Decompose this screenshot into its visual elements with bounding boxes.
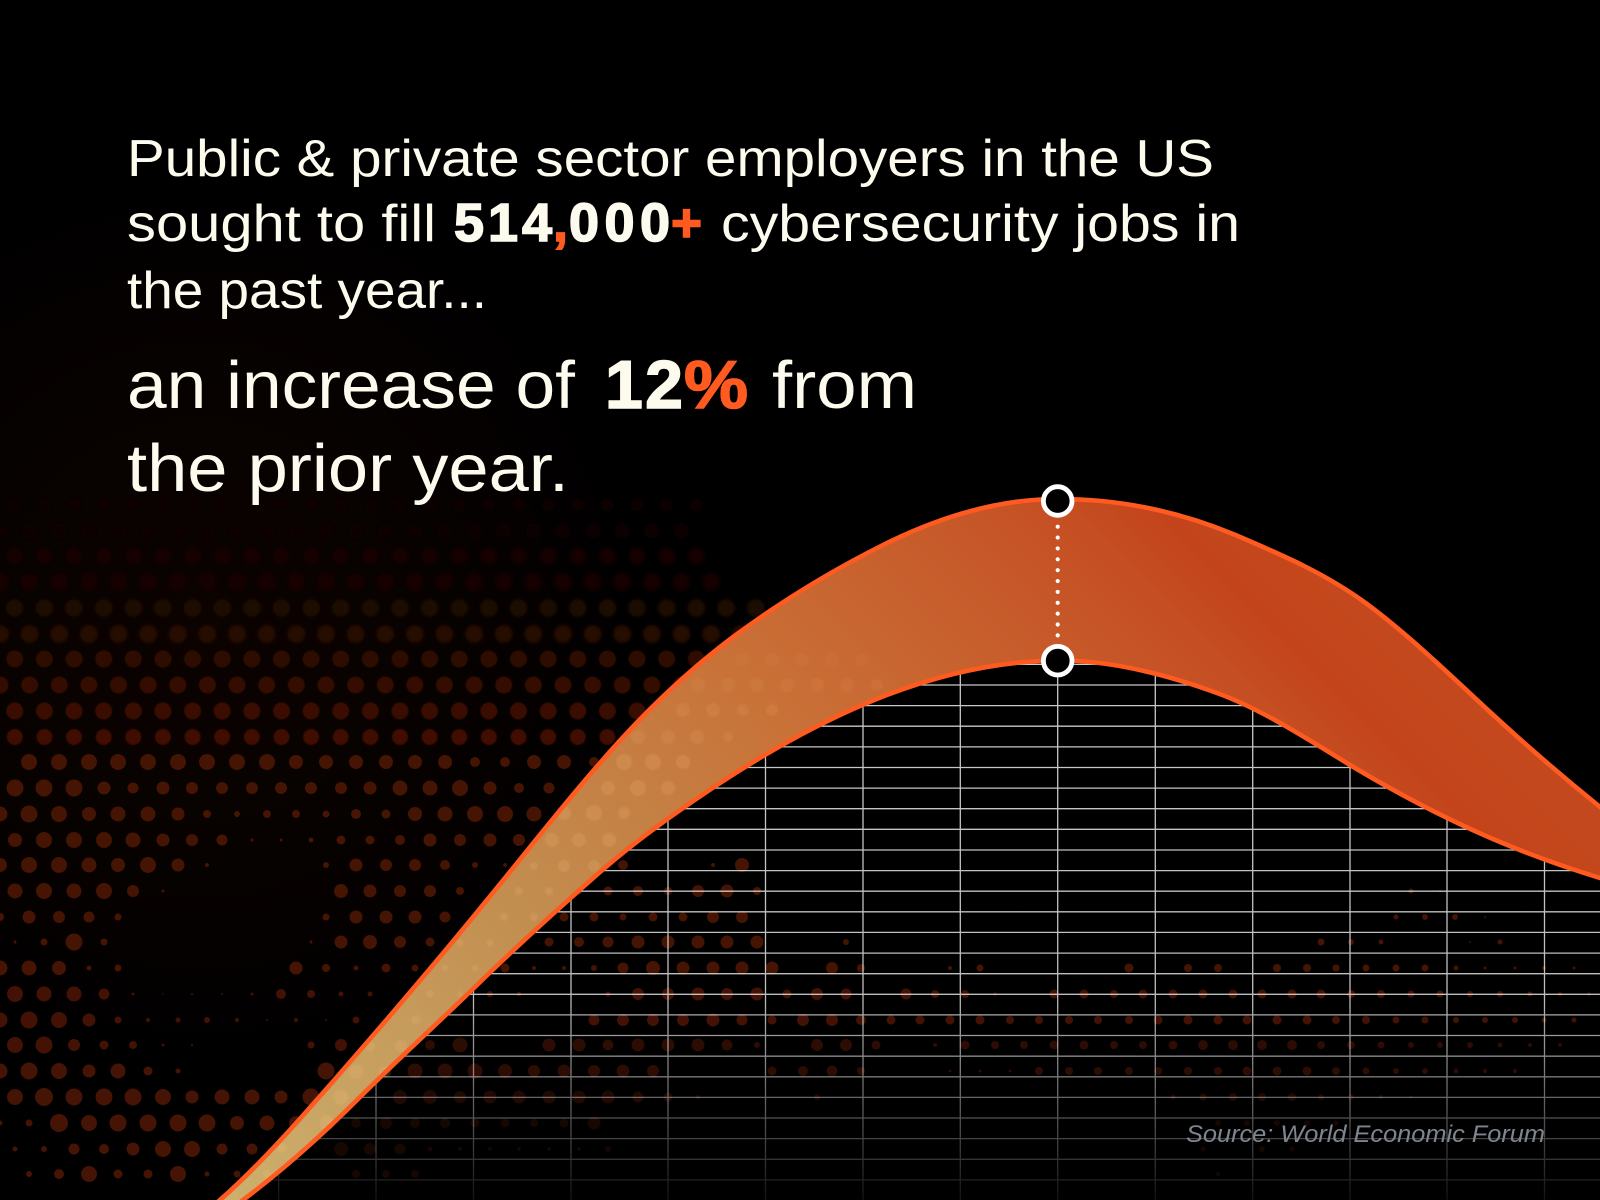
headline: job openings: Public & private sector employers in the US [127, 130, 1214, 188]
dotted connector between markers [1056, 527, 1060, 637]
lower curve line [210, 660, 1600, 1200]
headline: job openings [127, 130, 1240, 320]
grid under the curve [200, 660, 1600, 1200]
headline: year over year increase: an increase of [127, 348, 575, 423]
stat: 514,000+: 514 [454, 193, 552, 253]
halftone world map dots [0, 505, 1590, 1182]
stat: 514,000+: 000 [569, 193, 670, 253]
headline: year over year increase: the prior year. [127, 431, 569, 506]
halftone dots showing through band [263, 653, 883, 1178]
headline: year over year increase [127, 347, 917, 506]
upper curve line [190, 499, 1600, 1200]
stat: 12% [605, 347, 748, 423]
stat: 514,000+: + [671, 193, 702, 253]
stat: 514,000+: , [553, 193, 568, 253]
headline: year over year increase: from [772, 348, 917, 423]
marker: prior year peak [1043, 646, 1072, 675]
stat: 514,000+ [454, 193, 702, 253]
chart band between last year and this year [190, 499, 1600, 1200]
headline: job openings: the past year... [127, 262, 487, 320]
background glow [0, 100, 720, 1140]
headline: job openings: cybersecurity jobs in [721, 195, 1240, 253]
stat: 12%: % [684, 347, 748, 423]
source credit: Source: World Economic Forum [1186, 1121, 1545, 1148]
stat: 12%: 12 [605, 347, 683, 423]
headline: job openings: sought to fill [127, 195, 436, 253]
marker: current year peak [1043, 487, 1072, 515]
